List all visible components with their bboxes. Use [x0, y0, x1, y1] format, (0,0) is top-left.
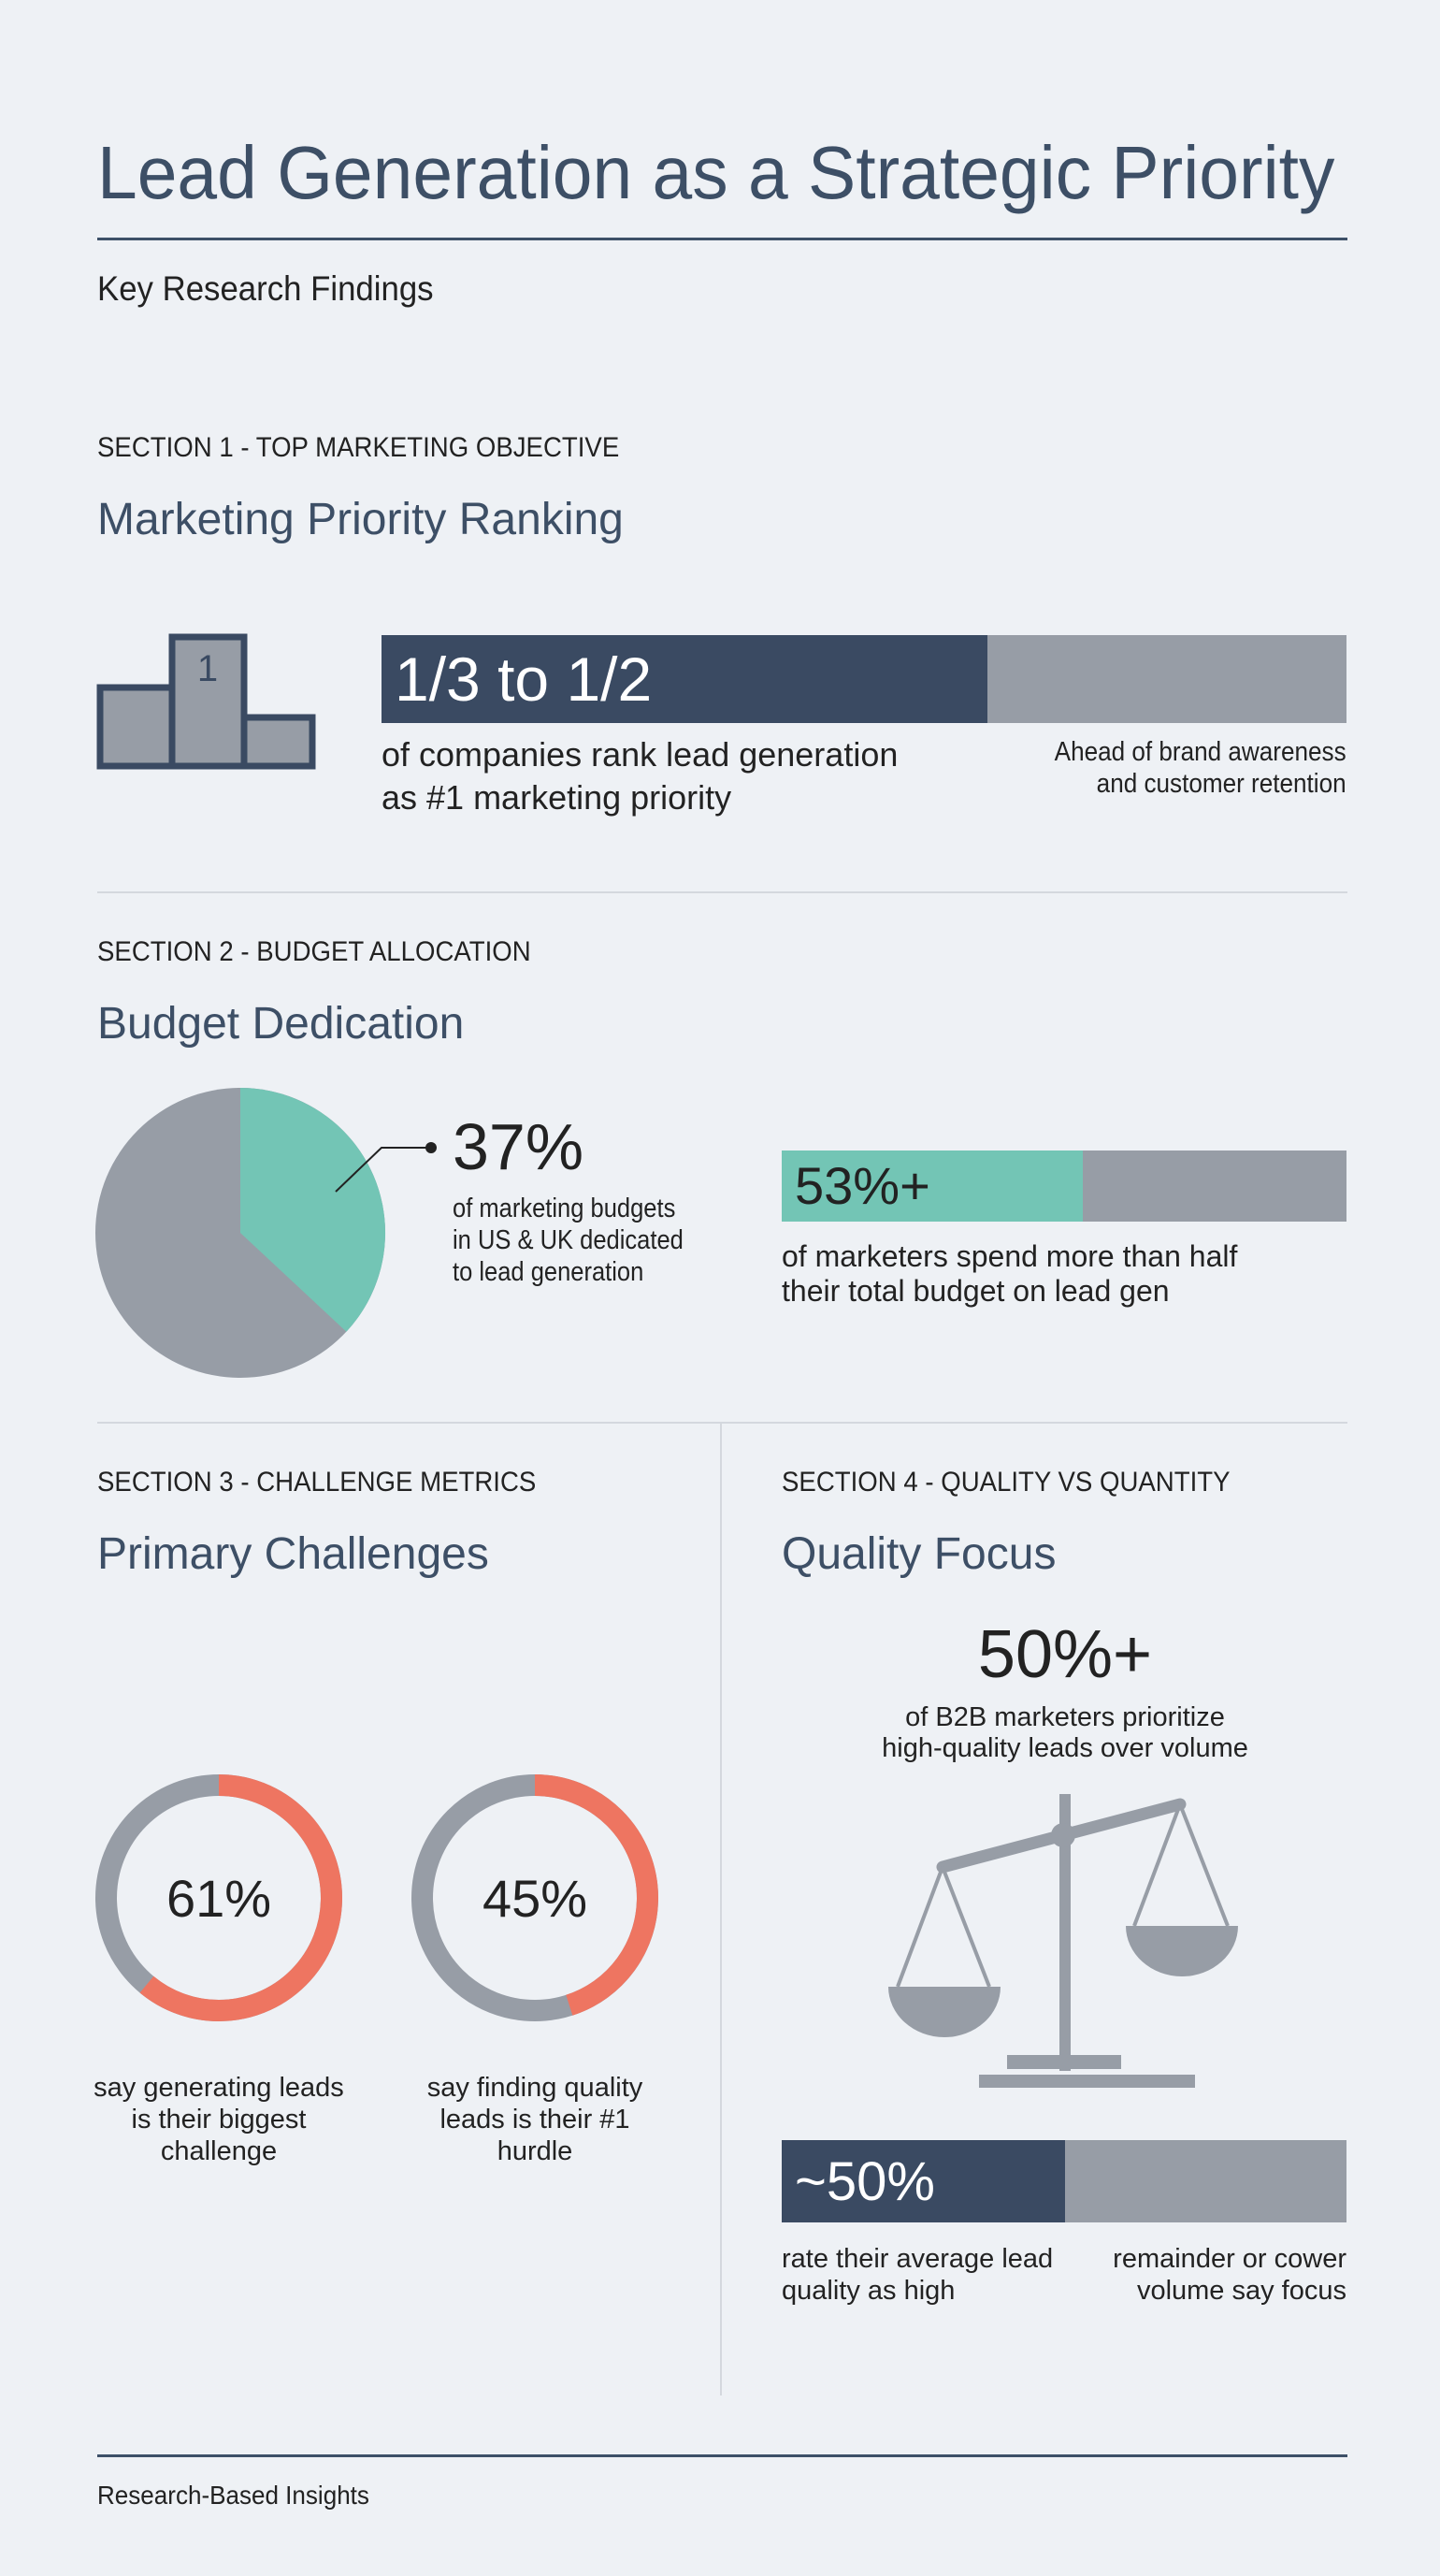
text: 53% description: their total budget on lead gen: [782, 1274, 1170, 1308]
section 1 heading: Marketing Priority Ranking: [97, 495, 624, 544]
section 2 label: SECTION 2 - BUDGET ALLOCATION: [97, 936, 531, 967]
text: remainder: volume say focus: [1137, 2276, 1346, 2306]
text: ahead of: Ahead of brand awareness: [1055, 737, 1346, 767]
bar: 53%: 53%+: [795, 1156, 930, 1215]
donut: 45%: 45%: [482, 1869, 587, 1928]
section 1 label: SECTION 1 - TOP MARKETING OBJECTIVE: [97, 432, 619, 463]
text: 37% description: in US & UK dedicated: [453, 1225, 684, 1255]
text: 50%+ description: high-quality leads over volume: [882, 1733, 1248, 1763]
title: Lead Generation as a Strategic Priority: [97, 131, 1334, 214]
caption: 45%: [427, 2073, 643, 2166]
caption: 61%: is their biggest: [131, 2105, 307, 2135]
section 3 label: SECTION 3 - CHALLENGE METRICS: [97, 1467, 536, 1498]
icon: balance scale: [888, 1794, 1238, 2088]
text: ahead of: [1055, 737, 1346, 799]
bar: priority ranking: 1/3 to 1/2: [395, 644, 652, 714]
caption: 45%: say finding quality: [427, 2073, 642, 2103]
text: 37% description: [453, 1194, 684, 1287]
text: ahead of: and customer retention: [1097, 769, 1346, 799]
text: ranking description: as #1 marketing priority: [382, 778, 731, 817]
text: remainder: [1113, 2244, 1346, 2306]
subtitle: Key Research Findings: [97, 269, 434, 308]
caption: 61%: challenge: [161, 2136, 277, 2166]
bar: 53%: [782, 1151, 1346, 1222]
bar: ~50%: [782, 2140, 1346, 2222]
text: 37% description: to lead generation: [453, 1257, 643, 1287]
text: rate quality: [782, 2244, 1053, 2306]
section 4 label: SECTION 4 - QUALITY VS QUANTITY: [782, 1467, 1231, 1498]
footer: Research-Based Insights: [97, 2481, 369, 2510]
donut: 45%: [411, 1774, 658, 2021]
pie chart: [95, 1088, 437, 1378]
section 2 heading: Budget Dedication: [97, 999, 464, 1049]
icon: podium: [97, 634, 316, 769]
text: 53% description: [782, 1239, 1238, 1308]
stat: 37%: 37%: [453, 1110, 583, 1183]
text: 37% description: of marketing budgets: [453, 1194, 675, 1223]
text: ranking description: [382, 735, 898, 817]
caption: 61%: [94, 2073, 344, 2166]
panel: section 4: [782, 1467, 1248, 1763]
text: ranking description: of companies rank lead generation: [382, 735, 898, 774]
text: remainder: remainder or cower: [1113, 2244, 1346, 2274]
donut: 61%: [95, 1774, 342, 2021]
section 4 heading: Quality Focus: [782, 1529, 1056, 1579]
text: 50%+ description: of B2B marketers prioritize: [905, 1702, 1225, 1732]
caption: 45%: hurdle: [497, 2136, 572, 2166]
stat: 50%+: 50%+: [978, 1617, 1152, 1692]
text: rate quality: rate their average lead: [782, 2244, 1053, 2274]
text: rate quality: quality as high: [782, 2276, 955, 2306]
bar: priority ranking: [382, 635, 1346, 723]
caption: 61%: say generating leads: [94, 2073, 344, 2103]
bar: ~50%: ~50%: [795, 2151, 935, 2212]
text: 50%+ description: [882, 1702, 1248, 1763]
text: 53% description: of marketers spend more than half: [782, 1239, 1237, 1273]
section 3 heading: Primary Challenges: [97, 1529, 489, 1579]
panel: section 3: [94, 1467, 658, 2166]
caption: 45%: leads is their #1: [439, 2105, 630, 2135]
icon: podium: 1: [197, 648, 218, 689]
donut: 61%: 61%: [166, 1869, 271, 1928]
